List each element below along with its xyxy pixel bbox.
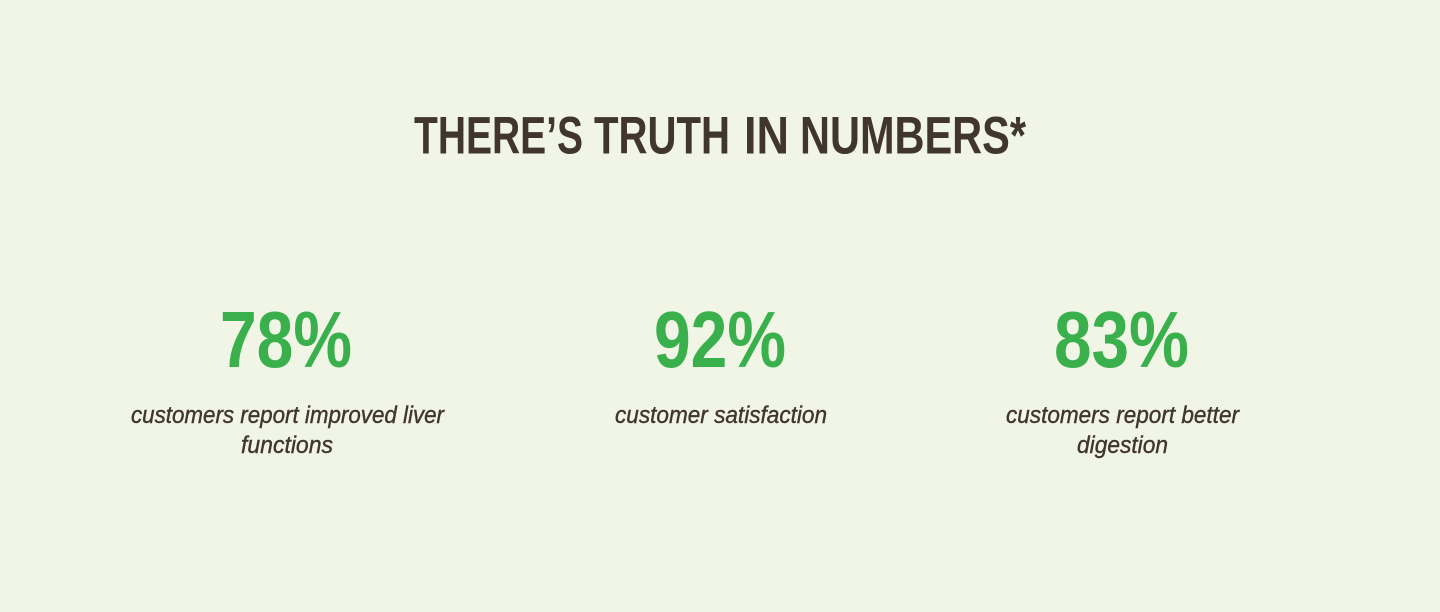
stat: 83% customers report better digestion	[1006, 295, 1240, 459]
number: 78%: 78%	[220, 295, 352, 384]
caption: better digestion: digestion	[1077, 432, 1168, 459]
caption: better digestion: customers report better	[1006, 402, 1240, 429]
number: 92%: 92%	[654, 295, 786, 384]
stat: 78% customers report improved liver functions	[131, 295, 445, 459]
stat: 92% customer satisfaction	[615, 295, 827, 429]
title: THERE’S	[414, 106, 583, 166]
title: IN	[744, 106, 789, 166]
caption: customer satisfaction: customer satisfaction	[615, 402, 827, 429]
caption: improved liver functions: customers report improved liver	[131, 402, 445, 429]
number: 83%: 83%	[1054, 295, 1189, 384]
title: NUMBERS*	[800, 106, 1026, 166]
caption: improved liver functions: functions	[241, 432, 333, 459]
title: TRUTH	[594, 106, 730, 166]
caption: better digestion	[1006, 402, 1240, 459]
caption: improved liver functions	[131, 402, 445, 459]
